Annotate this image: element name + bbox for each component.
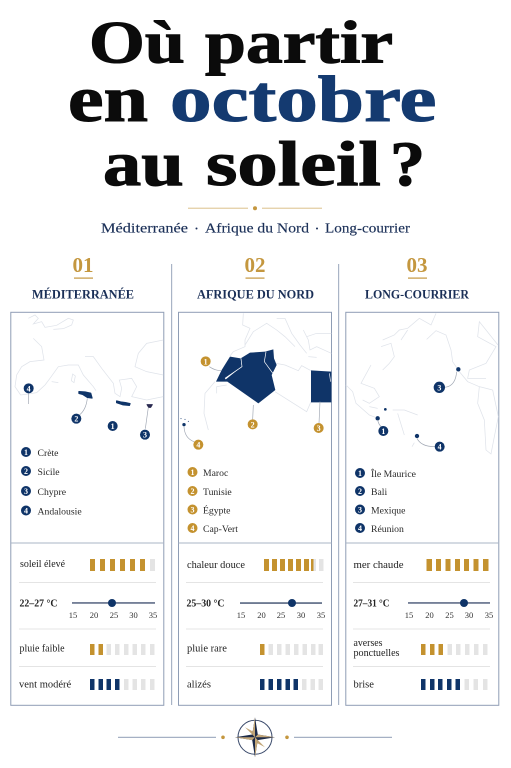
markers bbox=[24, 383, 150, 440]
legend: 3 bbox=[24, 487, 28, 496]
legend: 2 bbox=[24, 467, 28, 476]
markers: 3 bbox=[143, 431, 147, 440]
map: Long-courrier bbox=[346, 313, 498, 454]
temperature scale: 27–31 °C bbox=[354, 598, 390, 610]
legend bbox=[21, 447, 82, 518]
Sicile bbox=[79, 392, 92, 398]
legend: 1 bbox=[24, 448, 28, 457]
temperature scale: 20 bbox=[425, 610, 434, 620]
title: soleil bbox=[206, 128, 381, 199]
row: mer bbox=[354, 559, 488, 571]
row: alizés bbox=[187, 679, 323, 690]
markers: 3 bbox=[317, 424, 321, 433]
title: partir bbox=[205, 9, 393, 76]
markers: 4 bbox=[27, 384, 31, 393]
card frame bbox=[178, 312, 332, 705]
legend: Bali bbox=[371, 487, 387, 498]
row: soleil bbox=[20, 559, 155, 571]
row: brise bbox=[354, 679, 488, 690]
gold divider bbox=[188, 206, 322, 210]
row: alizés: alizés bbox=[187, 680, 211, 690]
row: chaleur: chaleur douce bbox=[187, 560, 245, 571]
title: Où bbox=[89, 10, 185, 76]
panel: Méditerranée bbox=[11, 253, 164, 705]
temperature scale: 30 bbox=[297, 610, 305, 620]
number 03: 03 bbox=[406, 253, 428, 277]
temperature scale: 22–27 °C bbox=[20, 598, 58, 610]
icon: compass rose bbox=[235, 717, 275, 757]
panel: Long-courrier bbox=[346, 253, 499, 705]
legend: Crète bbox=[38, 448, 58, 459]
legend bbox=[355, 468, 416, 535]
markers bbox=[378, 382, 445, 452]
legend: Réunion bbox=[371, 524, 404, 535]
legend: Mexique bbox=[371, 506, 405, 516]
markers: 3 bbox=[437, 383, 441, 392]
Chypre bbox=[147, 405, 152, 407]
subtitle: Afrique du Nord bbox=[205, 222, 309, 236]
legend: 3 bbox=[358, 506, 362, 514]
legend: Tunisie bbox=[203, 487, 232, 498]
temperature scale: 25–30 °C bbox=[186, 598, 224, 610]
markers: 4 bbox=[196, 441, 200, 450]
temperature scale bbox=[20, 598, 157, 620]
destination dots bbox=[375, 367, 460, 438]
row: pluie bbox=[187, 644, 323, 655]
title: au bbox=[103, 129, 184, 200]
card frame bbox=[346, 312, 499, 705]
title: ? bbox=[390, 128, 425, 199]
legend: 2 bbox=[358, 487, 362, 496]
Cap-Vert bbox=[180, 418, 189, 426]
legend: Andalousie bbox=[38, 506, 82, 518]
map: Afrique du Nord bbox=[180, 313, 331, 450]
subtitle: Long-courrier bbox=[325, 222, 410, 236]
row: chaleur bbox=[187, 559, 324, 571]
temperature scale: 25 bbox=[110, 610, 118, 620]
row: averses: ponctuelles bbox=[354, 648, 400, 659]
row: averses: averses bbox=[354, 638, 382, 649]
footer ornament bbox=[118, 717, 392, 757]
legend: Sicile bbox=[38, 467, 60, 478]
row: brise: brise bbox=[354, 680, 374, 690]
markers: 1 bbox=[111, 422, 115, 431]
row: mer: mer chaude bbox=[354, 560, 404, 571]
number 01: 01 bbox=[72, 253, 94, 277]
legend: 4 bbox=[190, 524, 194, 533]
legend: Égypte bbox=[203, 504, 230, 516]
heading Méditerranée: MÉDITERRANÉE bbox=[32, 286, 134, 302]
number 02: 02 bbox=[244, 253, 266, 277]
heading Afrique du Nord: AFRIQUE DU NORD bbox=[197, 286, 314, 302]
legend: Maroc bbox=[203, 468, 228, 479]
temperature scale: 15 bbox=[237, 610, 245, 620]
legend: Cap-Vert bbox=[203, 524, 238, 535]
card frame bbox=[11, 312, 164, 705]
temperature scale: 25 bbox=[277, 610, 285, 620]
title: octobre bbox=[170, 63, 436, 136]
temperature scale: 20 bbox=[257, 610, 266, 620]
temperature scale: 35 bbox=[317, 610, 325, 620]
legend: 1 bbox=[190, 468, 194, 477]
temperature scale: 30 bbox=[129, 610, 138, 620]
Égypte bbox=[311, 370, 331, 402]
markers bbox=[193, 356, 324, 450]
markers: 2 bbox=[251, 420, 255, 429]
temperature scale bbox=[186, 598, 325, 620]
legend bbox=[188, 467, 238, 535]
row: soleil: soleil élevé bbox=[20, 559, 65, 570]
legend: Île Maurice bbox=[371, 468, 416, 480]
panel: Afrique du Nord bbox=[178, 253, 332, 705]
row: vent: vent modéré bbox=[19, 680, 72, 690]
temperature scale: 20 bbox=[90, 610, 98, 620]
temperature scale: 35 bbox=[149, 610, 157, 620]
Maroc bbox=[216, 357, 242, 382]
markers: 1 bbox=[381, 427, 385, 436]
legend: Chypre bbox=[38, 487, 66, 498]
legend: 3 bbox=[190, 506, 194, 514]
temperature scale: 15 bbox=[405, 610, 413, 620]
title bbox=[68, 9, 436, 200]
temperature scale: 15 bbox=[69, 610, 77, 620]
temperature scale: 35 bbox=[485, 610, 493, 620]
column separators bbox=[171, 264, 339, 705]
markers: 4 bbox=[438, 443, 442, 452]
legend: 1 bbox=[358, 469, 362, 478]
subtitle bbox=[101, 222, 410, 236]
legend: 4 bbox=[24, 506, 28, 516]
Algérie et Tunisie bbox=[225, 349, 277, 403]
title: en bbox=[68, 63, 148, 135]
row: vent bbox=[19, 679, 154, 690]
map: Méditerranée bbox=[15, 315, 163, 440]
heading Long-courrier: LONG-COURRIER bbox=[365, 286, 470, 302]
legend: 4 bbox=[358, 524, 362, 533]
legend: 2 bbox=[190, 487, 194, 496]
temperature scale: 25 bbox=[445, 610, 454, 620]
markers: 1 bbox=[204, 357, 208, 366]
row: pluie: pluie rare bbox=[187, 644, 227, 654]
Crète bbox=[117, 401, 130, 405]
row: averses bbox=[354, 638, 488, 659]
temperature scale: 30 bbox=[465, 610, 473, 620]
markers: 2 bbox=[74, 415, 78, 424]
subtitle: Méditerranée bbox=[101, 222, 188, 236]
temperature scale bbox=[354, 598, 493, 620]
row: pluie bbox=[20, 644, 154, 655]
row: pluie: pluie faible bbox=[20, 644, 65, 654]
